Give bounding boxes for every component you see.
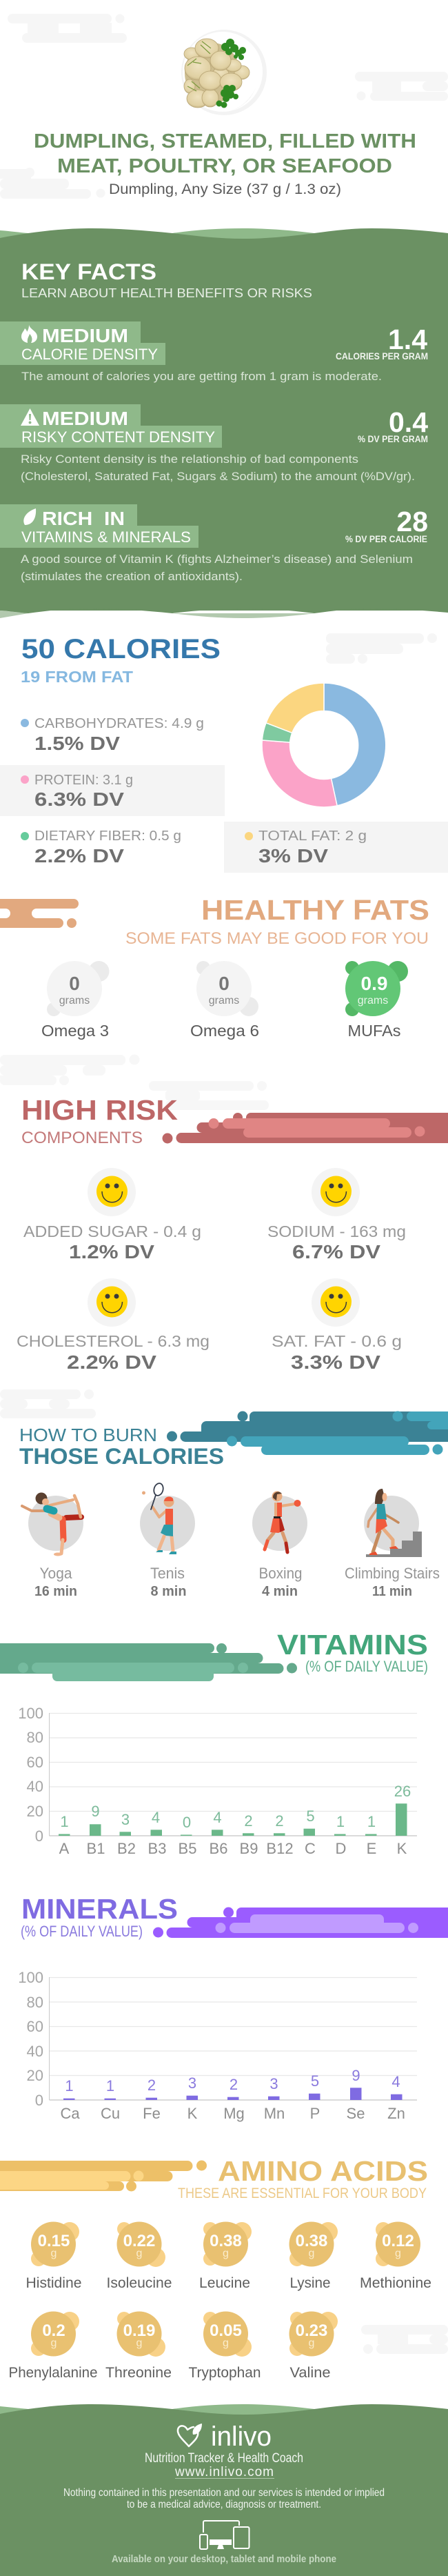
amino: isoleucine: g: [136, 2248, 142, 2259]
heading: 50 calories: 19 FROM FAT: [21, 668, 133, 686]
legend: carbohydrates: CARBOHYDRATES: 4.9 g: [34, 715, 204, 731]
bar chart: vitamins: [18, 1705, 417, 1857]
activity: boxing: Boxing: [259, 1565, 302, 1582]
bar chart: minerals: [18, 1969, 417, 2122]
bar chart: minerals: 5: [311, 2072, 319, 2090]
disclaimer: to be a medical advice, diagnosis or treatment.: [127, 2499, 321, 2510]
bar chart: vitamins: 3: [121, 1811, 130, 1828]
donut chart: macronutrients: [262, 683, 386, 807]
panel: vitamins: [0, 1629, 428, 1857]
panel: calories: [0, 633, 448, 873]
bar chart: vitamins: B9: [240, 1840, 258, 1857]
bar chart: vitamins: B1: [87, 1840, 105, 1857]
heading: key facts: [21, 259, 312, 300]
heading: how to burn: THOSE CALORIES: [19, 1444, 224, 1469]
heading: amino acids: [178, 2155, 428, 2201]
bar chart: vitamins: K: [397, 1840, 407, 1857]
amino: tryptophan: [189, 2311, 261, 2381]
footer tagline: www.inlivo.com: [174, 2465, 274, 2479]
bar chart: vitamins: 4: [213, 1809, 222, 1826]
amino: tryptophan: 0.05: [210, 2321, 242, 2340]
decorative blob: burn: [167, 1411, 448, 1455]
legend: dietary fiber: 2.2% DV: [34, 845, 124, 866]
bar chart: minerals: P: [310, 2105, 320, 2122]
amino: threonine: 0.19: [123, 2321, 155, 2340]
title: [34, 130, 416, 177]
item: saturated fat: [272, 1278, 402, 1373]
bar chart: vitamins: 4: [152, 1809, 160, 1826]
fact: risky content density: (Cholesterol, Saturated Fat, Sugars & Sodium) to the amount (%DV/gr).: [21, 470, 415, 483]
legend: dietary fiber: [21, 828, 181, 866]
fact: calorie density: CALORIES PER GRAM: [336, 351, 428, 361]
amino: methionine: g: [395, 2248, 401, 2259]
item: omega 6: Omega 6: [190, 1022, 259, 1040]
decorative blob: amino acids: [0, 2161, 207, 2191]
bar chart: vitamins: 1: [336, 1813, 345, 1830]
amino: phenylalanine: [8, 2311, 98, 2381]
bar chart: vitamins: 2: [244, 1812, 253, 1830]
panel: key facts: [0, 228, 448, 618]
amino: histidine: 0.15: [38, 2232, 70, 2250]
amino: isoleucine: [106, 2221, 172, 2291]
bar chart: minerals: 40: [27, 2043, 43, 2060]
bar chart: vitamins: 0: [35, 1827, 43, 1845]
amino: valine: g: [309, 2337, 314, 2349]
bar chart: vitamins: 100: [18, 1705, 43, 1722]
item: added sugar: ADDED SUGAR - 0.4 g: [23, 1222, 201, 1240]
decorative blob: vitamins: [0, 1643, 297, 1681]
serving size subtitle: Dumpling, Any Size (37 g / 1.3 oz): [109, 181, 341, 197]
heading: key facts: LEARN ABOUT HEALTH BENEFITS OR RISKS: [21, 286, 312, 300]
bar chart: minerals: 60: [27, 2018, 43, 2035]
bar chart: vitamins: D: [336, 1840, 346, 1857]
bar chart: minerals: Se: [347, 2105, 365, 2122]
heading: vitamins: VITAMINS: [277, 1629, 428, 1661]
bar chart: vitamins: 2: [275, 1812, 284, 1830]
heading: healthy fats: HEALTHY FATS: [201, 894, 429, 926]
title: MEAT, POULTRY, OR SEAFOOD: [57, 155, 392, 177]
heading: amino acids: AMINO ACIDS: [218, 2155, 428, 2187]
background clouds: high risk: [0, 1054, 269, 1110]
item: cholesterol: 2.2% DV: [67, 1351, 156, 1373]
bar chart: vitamins: A: [59, 1840, 70, 1857]
fact: rich in vitamins and minerals: [0, 504, 428, 583]
panel: minerals: [18, 1893, 448, 2122]
amino: methionine: Methionine: [360, 2275, 431, 2291]
bar chart: minerals: 4: [391, 2073, 400, 2090]
icon: warning triangle: [21, 408, 39, 426]
bar chart: minerals: Mg: [223, 2105, 245, 2122]
icon: leaf: [23, 508, 36, 525]
heading: 50 calories: [21, 634, 221, 686]
bar chart: minerals: 1: [65, 2077, 74, 2094]
background cloud: burn: [0, 1389, 96, 1418]
legend: protein: [0, 765, 225, 816]
heading: minerals: MINERALS: [21, 1893, 178, 1925]
fact: risky content density: MEDIUM: [42, 408, 128, 429]
bar chart: minerals: 2: [230, 2076, 238, 2093]
heading: healthy fats: SOME FATS MAY BE GOOD FOR YOU: [125, 929, 429, 948]
amino: lysine: g: [309, 2248, 314, 2259]
legend: total fat: TOTAL FAT: 2 g: [258, 828, 367, 844]
heading: how to burn: HOW TO BURN: [19, 1425, 157, 1445]
fact: risky content density: 0.4: [389, 406, 428, 438]
item: omega 3: Omega 3: [41, 1022, 109, 1040]
amino: leucine: Leucine: [199, 2275, 250, 2291]
fact: rich in vitamins and minerals: 28: [396, 506, 428, 537]
item: sodium: 6.7% DV: [292, 1241, 380, 1262]
fact: calorie density: [0, 321, 428, 383]
decorative blob: minerals: [153, 1907, 448, 1938]
fact: rich in vitamins and minerals: A good source of Vitamin K (fights Alzheimer’s disease) and Selenium: [21, 553, 413, 566]
logo: inlivo: inlivo: [211, 2421, 272, 2452]
bar chart: vitamins: 26: [394, 1783, 411, 1800]
amino: histidine: g: [51, 2248, 57, 2259]
panel: amino acids: [0, 2155, 431, 2381]
item: added sugar: 1.2% DV: [69, 1241, 154, 1262]
amino: lysine: Lysine: [289, 2275, 331, 2291]
bar chart: minerals: 1: [106, 2077, 114, 2094]
item: added sugar: [23, 1168, 201, 1262]
bar chart: vitamins: 20: [27, 1803, 43, 1820]
item: cholesterol: CHOLESTEROL - 6.3 mg: [17, 1332, 210, 1350]
amino: histidine: [26, 2221, 81, 2291]
bar chart: vitamins: E: [367, 1840, 376, 1857]
amino: methionine: 0.12: [382, 2232, 414, 2250]
amino: isoleucine: 0.22: [123, 2232, 155, 2250]
bar chart: vitamins: B5: [179, 1840, 196, 1857]
activity: tennis: [140, 1483, 195, 1599]
amino: tryptophan: g: [223, 2337, 229, 2349]
legend: carbohydrates: [21, 715, 204, 754]
bar chart: vitamins: 80: [27, 1729, 43, 1746]
bar chart: vitamins: C: [305, 1840, 316, 1857]
heading: key facts: KEY FACTS: [21, 259, 156, 284]
fact: risky content density: Risky Content density is the relationship of bad components: [21, 453, 358, 466]
icon: devices: [200, 2521, 250, 2549]
legend: dietary fiber: DIETARY FIBER: 0.5 g: [34, 828, 181, 844]
bar chart: vitamins: 40: [27, 1778, 43, 1795]
bar chart: minerals: Mn: [264, 2105, 285, 2122]
amino: phenylalanine: 0.2: [42, 2321, 65, 2340]
amino: valine: Valine: [289, 2365, 331, 2381]
bar chart: minerals: Fe: [143, 2105, 161, 2122]
bar chart: vitamins: 1: [367, 1813, 376, 1830]
activity: yoga: [22, 1493, 83, 1599]
bar chart: vitamins: 60: [27, 1754, 43, 1771]
disclaimer: Nothing contained in this presentation and our services is intended or implied: [63, 2487, 385, 2499]
legend: total fat: 3% DV: [258, 845, 328, 866]
decorative blob: high risk: [163, 1113, 448, 1144]
fact: calorie density: The amount of calories you are getting from 1 gram is moderate.: [21, 370, 382, 383]
item: omega 6: grams: [209, 995, 239, 1007]
amino: leucine: [199, 2221, 252, 2291]
activity: tennis: 8 min: [150, 1584, 186, 1599]
legend: protein: PROTEIN: 3.1 g: [34, 772, 133, 788]
legend: total fat: [224, 822, 448, 873]
heading: vitamins: [277, 1629, 428, 1675]
panel: how to burn those calories: [19, 1411, 448, 1599]
background cloud: amino acids: [361, 2325, 448, 2354]
heading: how to burn: [19, 1425, 224, 1469]
bar chart: vitamins: 0: [183, 1814, 191, 1831]
bar chart: minerals: 20: [27, 2067, 43, 2084]
legend: carbohydrates: 1.5% DV: [34, 733, 120, 754]
bar chart: minerals: 3: [269, 2075, 278, 2092]
heading: high risk: [21, 1094, 178, 1147]
footer tagline: [145, 2451, 303, 2479]
bar chart: minerals: 0: [35, 2092, 43, 2109]
item: MUFAs: grams: [358, 995, 388, 1007]
amino: threonine: Threonine: [105, 2365, 172, 2381]
item: saturated fat: SAT. FAT - 0.6 g: [272, 1332, 402, 1350]
bar chart: vitamins: B12: [266, 1840, 294, 1857]
panel: healthy fats: [0, 894, 429, 1040]
item: cholesterol: [17, 1278, 210, 1373]
amino: phenylalanine: g: [51, 2337, 57, 2349]
amino: methionine: [360, 2221, 431, 2291]
bar chart: minerals: 2: [147, 2077, 156, 2094]
item: sodium: SODIUM - 163 mg: [267, 1222, 406, 1240]
item: saturated fat: 3.3% DV: [291, 1351, 380, 1373]
activity: yoga: Yoga: [40, 1565, 72, 1582]
amino: isoleucine: Isoleucine: [106, 2275, 172, 2291]
bar chart: minerals: 100: [18, 1969, 43, 1986]
panel: footer: [0, 2404, 448, 2576]
activity: climbing stairs: Climbing Stairs: [345, 1565, 440, 1582]
fact: calorie density: 1.4: [388, 324, 427, 355]
bar chart: vitamins: B6: [210, 1840, 227, 1857]
bar chart: vitamins: B3: [148, 1840, 166, 1857]
amino: lysine: 0.38: [296, 2232, 327, 2250]
amino: leucine: g: [223, 2248, 229, 2259]
icon: flame: [21, 325, 37, 343]
bar chart: minerals: Cu: [101, 2105, 120, 2122]
activity: yoga: 16 min: [34, 1584, 77, 1599]
panel: high risk: [17, 1094, 448, 1373]
amino: phenylalanine: Phenylalanine: [8, 2365, 98, 2381]
fact: rich in vitamins and minerals: VITAMINS & MINERALS: [21, 528, 191, 546]
amino: leucine: 0.38: [210, 2232, 242, 2250]
item: omega 3: 0: [69, 973, 80, 994]
bar chart: vitamins: B2: [117, 1840, 136, 1857]
heading: minerals: [21, 1893, 178, 1940]
item: omega 6: [190, 961, 259, 1040]
amino: threonine: [105, 2311, 172, 2381]
amino: threonine: g: [136, 2337, 142, 2349]
item: MUFAs: [345, 961, 408, 1040]
fact: calorie density: CALORIE DENSITY: [21, 346, 158, 363]
fact: risky content density: [0, 404, 428, 483]
heading: healthy fats: [125, 894, 429, 948]
logo: inlivo: [178, 2421, 272, 2452]
amino: valine: 0.23: [296, 2321, 327, 2340]
item: omega 3: [41, 961, 109, 1040]
item: sodium: [267, 1168, 406, 1262]
activity: boxing: [252, 1492, 307, 1599]
item: omega 3: grams: [59, 995, 90, 1007]
fact: calorie density: MEDIUM: [42, 325, 128, 346]
activity: climbing stairs: 11 min: [372, 1584, 412, 1599]
bar chart: vitamins: 1: [60, 1813, 69, 1830]
legend: protein: 6.3% DV: [34, 789, 124, 810]
bar chart: minerals: 9: [352, 2067, 360, 2084]
bar chart: minerals: K: [187, 2105, 198, 2122]
bar chart: minerals: Ca: [60, 2105, 80, 2122]
disclaimer: [63, 2487, 385, 2510]
item: MUFAs: 0.9: [361, 973, 387, 994]
fact: rich in vitamins and minerals: (stimulates the creation of antioxidants).: [21, 570, 243, 583]
fact: risky content density: % DV PER GRAM: [358, 434, 428, 444]
footer tagline: Nutrition Tracker & Health Coach: [145, 2451, 303, 2466]
amino: valine: [289, 2311, 338, 2381]
bar chart: minerals: Zn: [387, 2105, 405, 2122]
bar chart: minerals: 80: [27, 1994, 43, 2011]
fact: rich in vitamins and minerals: % DV PER CALORIE: [345, 534, 427, 544]
title: DUMPLING, STEAMED, FILLED WITH: [34, 130, 416, 152]
heading: minerals: (% OF DAILY VALUE): [21, 1923, 143, 1940]
fact: rich in vitamins and minerals: RICH IN: [42, 508, 125, 529]
food photo: dumplings on a plate: [181, 30, 267, 115]
heading: high risk: HIGH RISK: [21, 1094, 178, 1126]
item: omega 6: 0: [218, 973, 230, 994]
activity: tennis: Tenis: [150, 1565, 185, 1582]
background clouds: header: [0, 14, 448, 199]
amino: tryptophan: Tryptophan: [189, 2365, 261, 2381]
amino: histidine: Histidine: [26, 2275, 81, 2291]
bar chart: vitamins: 9: [91, 1803, 100, 1820]
activity: boxing: 4 min: [262, 1584, 298, 1599]
heading: high risk: COMPONENTS: [21, 1129, 143, 1147]
bar chart: minerals: 3: [188, 2074, 196, 2092]
decorative blob: healthy fats: [0, 899, 79, 928]
fact: risky content density: RISKY CONTENT DENSITY: [21, 428, 215, 446]
heading: 50 calories: 50 CALORIES: [21, 634, 221, 664]
amino: lysine: [289, 2221, 338, 2291]
bar chart: vitamins: 5: [306, 1807, 315, 1825]
item: MUFAs: MUFAs: [347, 1022, 401, 1040]
availability note: Available on your desktop, tablet and mobile phone: [112, 2553, 336, 2565]
activity: climbing stairs: [345, 1489, 440, 1599]
